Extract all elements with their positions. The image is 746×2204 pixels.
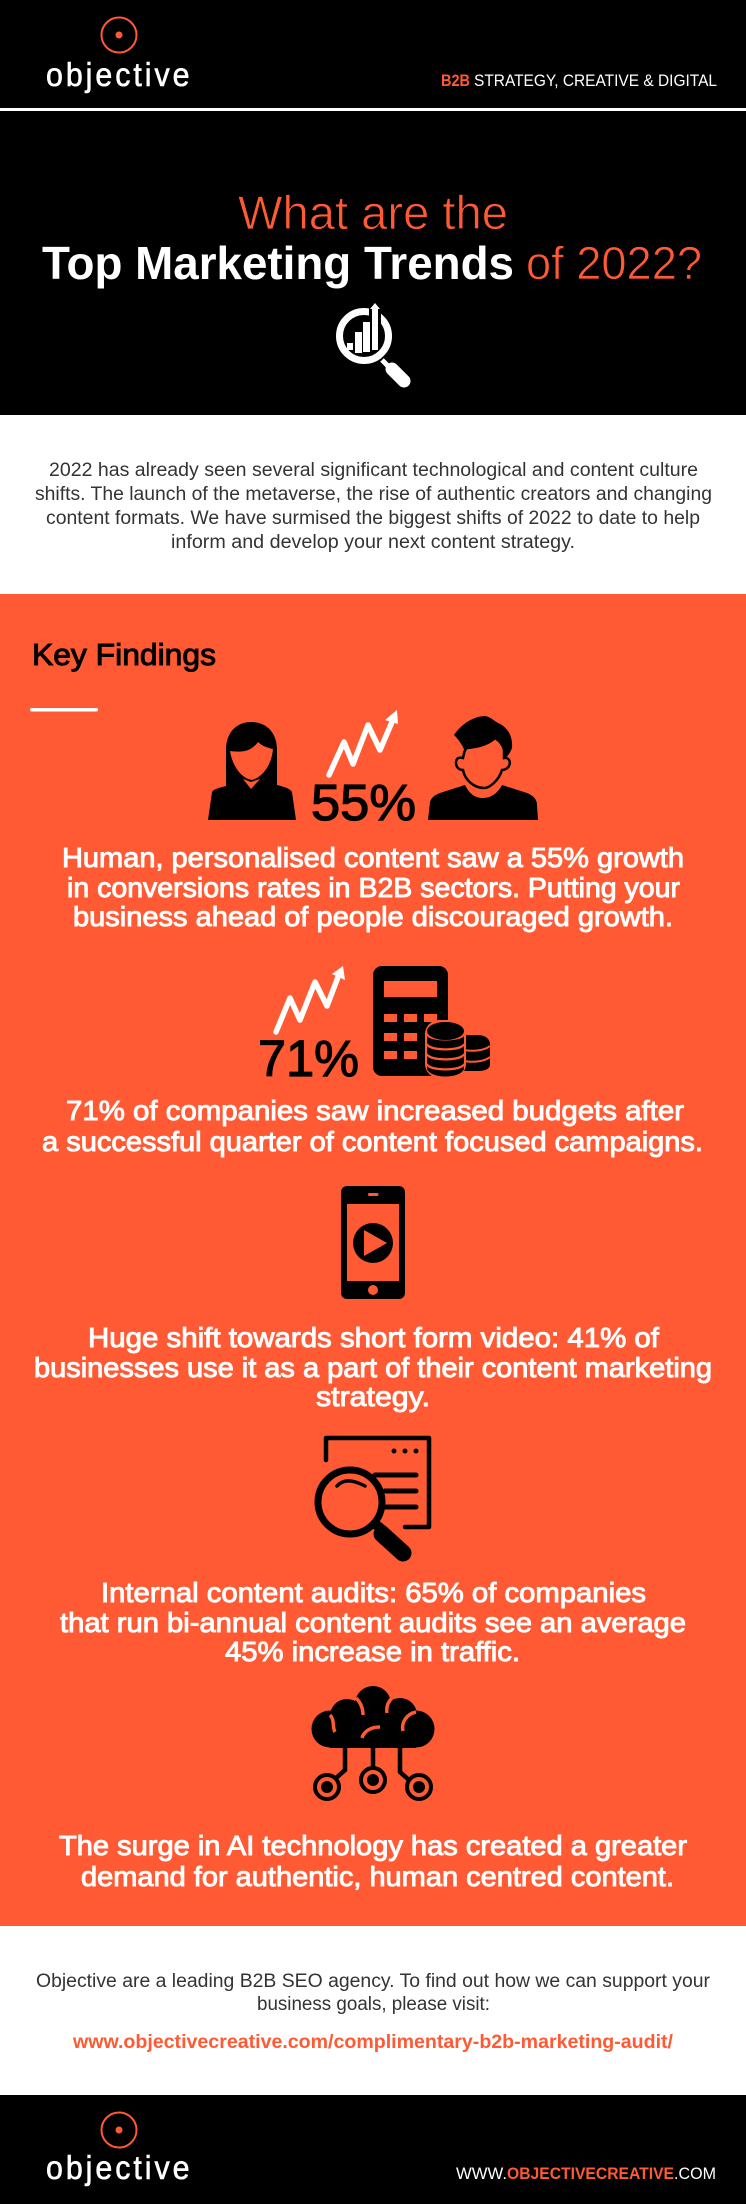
icon: AI brain cloud <box>312 1686 434 1799</box>
finding 2 text: 71% of companies saw increased budgets after <box>66 1095 684 1126</box>
icon: content audit magnifier <box>318 1438 429 1553</box>
finding 5 text: demand for authentic, human centred content. <box>81 1861 674 1892</box>
call to action link: www.objectivecreative.com/complimentary-b2b-marketing-audit/ <box>72 2032 674 2053</box>
title: Top Marketing Trends <box>42 237 514 289</box>
finding 2 text: a successful quarter of content focused campaigns. <box>42 1126 703 1157</box>
title <box>42 186 702 289</box>
finding 3 text: businesses use it as a part of their content marketing <box>34 1352 712 1383</box>
footer website: .COM <box>674 2165 716 2183</box>
intro text: shifts. The launch of the metaverse, the rise of authentic creators and changing <box>35 484 712 505</box>
finding 5 text <box>59 1830 687 1892</box>
finding 2 text <box>42 1095 703 1157</box>
call to action text <box>36 1971 711 2015</box>
finding 1 text: in conversions rates in B2B sectors. Putting your <box>67 872 680 903</box>
intro text: inform and develop your next content strategy. <box>171 532 575 553</box>
heading: key findings: Key Findings <box>32 637 216 672</box>
finding 1 text <box>62 842 684 932</box>
tagline: STRATEGY, CREATIVE & DIGITAL <box>474 72 717 90</box>
title: of 2022? <box>526 237 702 289</box>
tagline: B2B <box>441 72 470 90</box>
icon: calculator and coins <box>373 966 490 1078</box>
finding 1 text: business ahead of people discouraged growth. <box>73 901 673 932</box>
intro text: 2022 has already seen several significant technological and content culture <box>49 460 698 481</box>
finding 4 text: Internal content audits: 65% of companies <box>101 1577 646 1608</box>
finding 1 text: Human, personalised content saw a 55% growth <box>62 842 684 873</box>
logo: objective footer <box>46 2112 190 2186</box>
stat: 55%: 55% <box>311 774 416 831</box>
panel: header <box>0 0 746 415</box>
title: What are the <box>238 186 508 239</box>
heading underline <box>30 708 98 712</box>
finding 3 text <box>34 1322 712 1412</box>
footer website: WWW. <box>456 2165 507 2183</box>
finding 4 text: that run bi-annual content audits see an average <box>60 1607 686 1638</box>
icon: growth arrow 2 <box>276 966 345 1032</box>
icon: growth arrow <box>329 710 398 775</box>
logo: objective: objective <box>46 56 190 93</box>
logo: objective <box>46 18 190 93</box>
finding 5 text: The surge in AI technology has created a greater <box>59 1830 687 1861</box>
logo: objective footer: objective <box>46 2149 190 2186</box>
panel: key findings <box>0 594 746 1926</box>
icon: man <box>428 716 538 820</box>
icon: magnifier with chart <box>340 303 404 381</box>
icon: phone with video <box>341 1186 405 1299</box>
footer website: OBJECTIVECREATIVE <box>507 2165 674 2183</box>
footer website <box>456 2165 716 2183</box>
intro text <box>35 460 712 553</box>
intro text: content formats. We have surmised the biggest shifts of 2022 to date to help <box>46 508 700 529</box>
stat: 71%: 71% <box>258 1030 359 1087</box>
finding 3 text: strategy. <box>316 1381 430 1412</box>
finding 4 text <box>60 1577 686 1667</box>
icon: woman <box>208 722 296 820</box>
call to action text: business goals, please visit: <box>257 1994 490 2015</box>
call to action text: Objective are a leading B2B SEO agency. To find out how we can support your <box>36 1971 711 1992</box>
panel: footer <box>0 2095 746 2204</box>
finding 4 text: 45% increase in traffic. <box>225 1636 520 1667</box>
finding 3 text: Huge shift towards short form video: 41% of <box>88 1322 659 1353</box>
